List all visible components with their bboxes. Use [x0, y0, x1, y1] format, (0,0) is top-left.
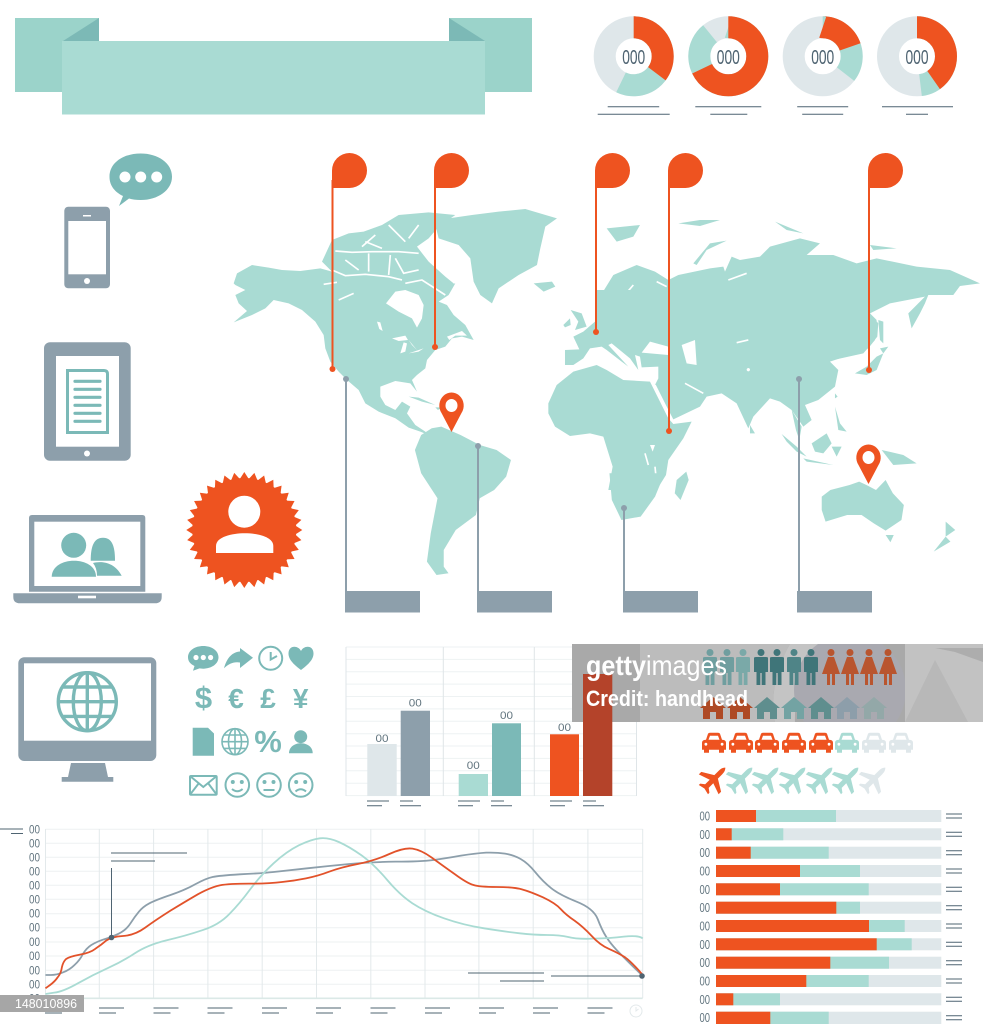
stacked bar chart: 00	[700, 901, 710, 915]
icon: speech bubble	[110, 154, 172, 206]
new zealand	[934, 522, 955, 552]
world map	[234, 209, 980, 575]
north america and greenland	[234, 209, 557, 435]
gray location markers	[343, 376, 872, 612]
icon: heart	[288, 647, 314, 670]
icon: document	[193, 728, 214, 756]
y axis labels: 00	[29, 909, 40, 921]
stacked bar chart: 00	[700, 828, 710, 842]
icon: sad face	[289, 773, 313, 797]
stacked bar chart: 00	[700, 883, 710, 897]
currency symbols: ¥	[293, 683, 309, 714]
watermark id strip: 148010896	[15, 996, 77, 1011]
currency symbols: $	[195, 680, 212, 715]
line chart	[0, 824, 645, 1017]
stacked bar chart: 00	[700, 956, 710, 970]
donut 4: 000	[906, 47, 928, 69]
bar chart: 00	[558, 722, 571, 734]
red flag markers	[330, 153, 903, 434]
southern eurasia and north africa	[548, 290, 917, 490]
south america	[415, 427, 511, 575]
australia	[822, 480, 904, 542]
y axis labels: 00	[29, 937, 40, 949]
donut 3	[794, 27, 852, 114]
bar chart: 00	[376, 733, 388, 745]
donut 2: 000	[717, 47, 740, 69]
people icon row	[703, 649, 897, 685]
icon: desktop monitor with globe	[18, 657, 156, 782]
bar chart: 00	[467, 760, 480, 772]
y axis labels: 00	[29, 951, 40, 963]
donut charts	[598, 27, 953, 114]
icon: clock	[259, 647, 282, 670]
y axis labels: 00	[29, 880, 40, 892]
icon: smartphone	[64, 207, 110, 288]
currency symbols: €	[228, 683, 244, 714]
y axis labels: 00	[29, 979, 40, 991]
donut 2	[695, 27, 761, 114]
icon: small globe	[222, 729, 248, 755]
icon: neutral face	[257, 773, 281, 797]
map pins	[439, 393, 881, 484]
stacked bar chart: 00	[700, 810, 710, 824]
y axis labels: 00	[29, 852, 40, 864]
northern eurasia	[600, 220, 980, 375]
x axis labels	[45, 1008, 612, 1013]
bar chart: 00	[500, 710, 513, 722]
y axis labels: 00	[29, 866, 40, 878]
y axis labels: 00	[29, 894, 40, 906]
stacked bar chart: 00	[700, 920, 710, 934]
madagascar	[675, 472, 689, 500]
stacked bar chart: 00	[700, 864, 710, 878]
stacked bar chart: 00	[700, 846, 710, 860]
right callout	[468, 973, 645, 981]
currency symbols: £	[260, 683, 276, 714]
icon: small speech bubble	[188, 646, 218, 671]
stacked bar chart	[700, 810, 962, 1024]
y axis labels	[29, 824, 40, 1005]
percent sign: %	[254, 724, 282, 759]
stacked bar chart: 00	[700, 974, 710, 988]
y axis labels: 00	[29, 824, 40, 836]
house icon row	[700, 697, 887, 719]
icon: laptop with people	[13, 515, 162, 603]
y axis labels: 00	[29, 965, 40, 977]
icon: orange badge with person	[176, 461, 313, 599]
canadian arctic archipelago	[322, 212, 455, 293]
icon: envelope	[190, 776, 217, 795]
watermark text: Credit: handhead	[586, 686, 748, 711]
currency symbols	[195, 680, 309, 715]
stacked bar chart: 00	[700, 938, 710, 952]
watermark text	[586, 650, 748, 711]
southern africa	[609, 473, 665, 520]
icon: faint clock	[630, 1005, 642, 1017]
icon: tablet with document	[44, 342, 131, 461]
watermark text: gettyimages	[586, 650, 727, 681]
chart curves	[45, 838, 643, 994]
stacked bar chart: 00	[700, 993, 710, 1007]
watermark band	[572, 644, 983, 722]
watermark id strip	[0, 995, 84, 1012]
donut 3: 000	[811, 47, 834, 69]
y axis labels: 00	[29, 993, 40, 1005]
donut 4	[882, 27, 953, 114]
donut 1: 000	[622, 47, 645, 69]
icon: person	[289, 730, 313, 753]
y axis labels: 00	[29, 838, 40, 850]
bar chart	[367, 674, 612, 806]
icon: happy face	[226, 773, 249, 797]
bar chart: 00	[409, 698, 422, 710]
ribbon banner	[15, 18, 532, 114]
southern continents	[415, 427, 955, 575]
small icon set	[188, 646, 314, 797]
left callout	[109, 853, 187, 940]
car icon row	[702, 733, 913, 753]
y axis labels: 00	[29, 923, 40, 935]
bar chart grid	[346, 647, 636, 796]
icon: arrow	[224, 648, 253, 668]
plane icon row	[693, 758, 895, 800]
donut 1	[598, 27, 670, 114]
